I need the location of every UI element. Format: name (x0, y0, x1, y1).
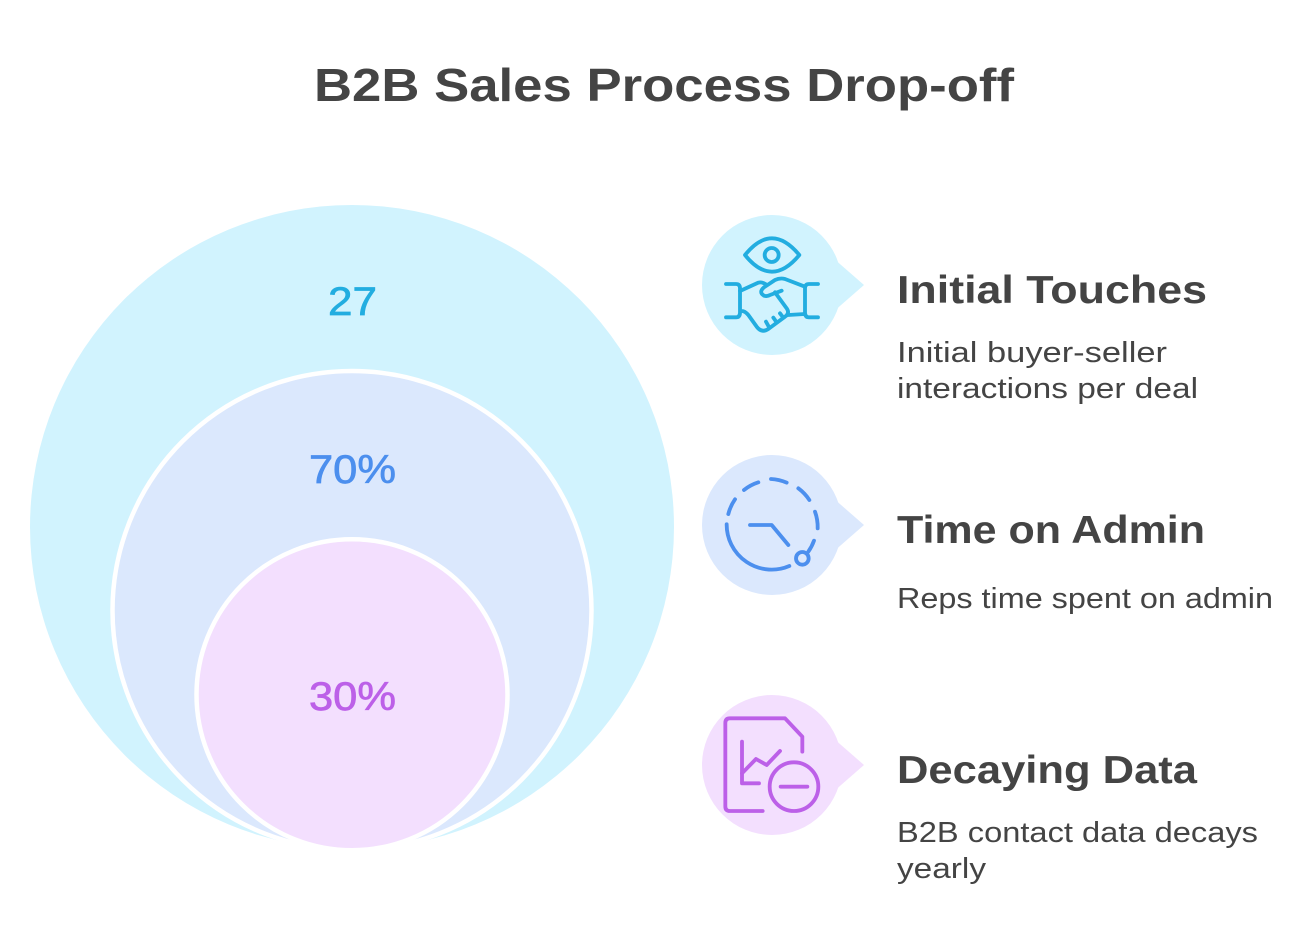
bubble icon: eye and handshake (702, 215, 864, 355)
circle: outer 27 (30, 205, 674, 849)
circle: middle 70% (112, 371, 592, 850)
heading: Time on Admin: Time on Admin (897, 509, 1205, 552)
value: 27: 27 (328, 280, 377, 324)
text: Decaying Data description (897, 817, 1258, 885)
heading: Initial Touches: Initial Touches (897, 269, 1207, 312)
text: Initial Touches description: Initial buyer-seller (897, 337, 1167, 369)
bubble icon: dashed clock (702, 455, 864, 595)
heading: Decaying Data: Decaying Data (897, 749, 1197, 792)
bubble icon: document with chart and minus (702, 695, 864, 835)
text: Initial Touches description (897, 337, 1198, 405)
text: Decaying Data description: B2B contact data decays (897, 817, 1258, 849)
value: 70%: 70% (309, 448, 396, 492)
text: Time on Admin description: Reps time spent on admin (897, 583, 1273, 615)
circle: inner 30% (196, 539, 508, 850)
nested circle chart (30, 205, 674, 850)
title: B2B Sales Process Drop-off (314, 59, 1015, 111)
value: 30%: 30% (309, 675, 396, 719)
text: Initial Touches description: interactions per deal (897, 373, 1198, 405)
text: Decaying Data description: yearly (897, 853, 987, 885)
